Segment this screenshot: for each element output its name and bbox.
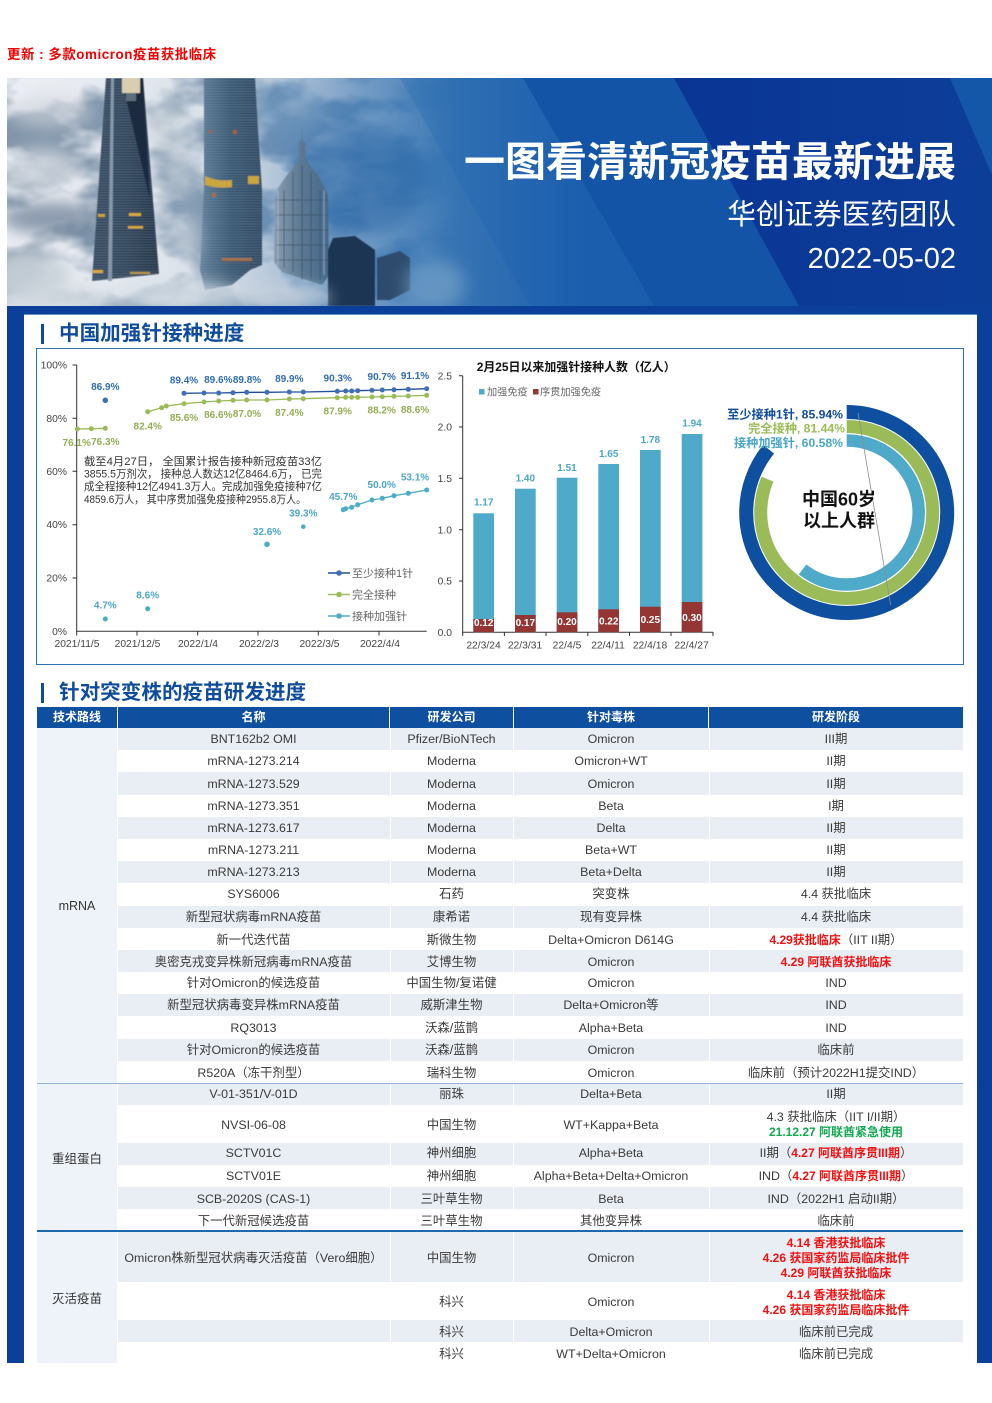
team name: 华创证券医药团队: [727, 199, 956, 231]
table group: recombinant protein: 4.3 获批临床（IIT I/II期）: [767, 1110, 905, 1124]
table group: mRNA: Delta: [597, 821, 625, 835]
series: fully vaccinated: 76.1%: [63, 438, 91, 449]
table group: inactivated vaccine: 4.14 香港获批临床: [787, 1236, 885, 1250]
table group: recombinant protein: Beta: [598, 1192, 624, 1206]
table group: recombinant protein: SCB-2020S (CAS-1): [197, 1192, 310, 1206]
table header row: 研发公司: [427, 710, 476, 724]
donut chart: population aged 60 and above: [727, 405, 954, 620]
table group: recombinant protein: NVSI-06-08: [221, 1118, 286, 1132]
bar chart y axis labels: 1.0: [438, 526, 452, 536]
bar chart y axis labels: 1.5: [438, 474, 452, 485]
series: booster: 4.7%: [94, 600, 117, 612]
series: booster: [94, 472, 429, 622]
table group: mRNA: mRNA-1273.529: [207, 777, 300, 791]
x axis labels: 2021/11/5: [54, 639, 100, 650]
table group: recombinant protein: Alpha+Beta: [579, 1146, 643, 1160]
icon: foreground dark buildings: [328, 236, 410, 306]
table group: mRNA: 沃森/蓝鹊: [425, 1021, 478, 1035]
series: fully vaccinated: 88.2%: [368, 406, 396, 416]
sequential booster value labels: 0.22: [599, 616, 619, 628]
column gaps: [390, 728, 391, 1363]
table header row: [37, 707, 963, 728]
bar chart legend: 序贯加强免疫: [540, 386, 601, 398]
table group: mRNA: mRNA-1273.214: [207, 754, 300, 768]
table group: mRNA: Delta+Omicron D614G: [548, 933, 674, 947]
table group: mRNA: 新型冠状病毒变异株mRNA疫苗: [167, 998, 340, 1012]
total value labels: 1.51: [557, 463, 577, 474]
bar chart y axis labels: 0.0: [438, 628, 452, 639]
ring: booster: [775, 440, 919, 584]
annotation text: 4859.6万人， 其中序贯加强免疫接种2955.8万人。: [84, 492, 306, 506]
y axis labels: 80%: [46, 414, 67, 425]
series: fully vaccinated: 76.3%: [91, 437, 120, 448]
series: fully vaccinated: 87.9%: [324, 406, 352, 418]
heading: variant vaccine progress: 针对突变株的疫苗研发进度: [59, 681, 306, 704]
table group: mRNA: Alpha+Beta: [579, 1021, 643, 1035]
table group: mRNA: II期: [826, 777, 846, 791]
table group: mRNA: mRNA: [59, 898, 95, 912]
x axis labels: 2022/1/4: [178, 639, 218, 650]
table group: inactivated vaccine: 4.26 获国家药监局临床批件: [763, 1302, 909, 1316]
table group: mRNA: Omicron: [588, 1066, 634, 1080]
sequential booster value labels: 0.25: [641, 615, 660, 626]
table group: mRNA: Omicron: [588, 1043, 634, 1057]
table group: mRNA: I期: [828, 799, 844, 813]
series: booster: 32.6%: [253, 527, 281, 538]
table group: mRNA: 临床前（预计2022H1提交IND）: [748, 1066, 924, 1080]
blue diagonal panels: [400, 78, 992, 306]
table group: recombinant protein: V-01-351/V-01D: [209, 1086, 298, 1100]
sequential booster value labels: 0.12: [474, 618, 494, 629]
series: fully vaccinated: 87.4%: [275, 408, 304, 419]
table group: mRNA: Beta+Delta: [580, 865, 642, 879]
blue page frame: [7, 306, 992, 1363]
series: booster: 50.0%: [368, 480, 396, 491]
table group: mRNA: Omicron: [588, 777, 634, 791]
bar chart y axis labels: [438, 372, 452, 639]
table group: mRNA: Beta: [598, 799, 624, 813]
series: fully vaccinated: 88.6%: [401, 405, 429, 416]
ring: at least one dose: [746, 412, 947, 613]
series: fully vaccinated: 87.0%: [233, 409, 261, 420]
table group: mRNA: 针对Omicron的候选疫苗: [187, 976, 320, 990]
annotation text: 截至4月27日， 全国累计报告接种新冠疫苗33亿: [84, 454, 322, 468]
table group: mRNA: [37, 728, 963, 1083]
bar chart x axis labels: 22/3/31: [508, 640, 542, 652]
table group: recombinant protein: 21.12.27 阿联酋紧急使用: [769, 1125, 903, 1139]
table group: recombinant protein: 三叶草生物: [421, 1214, 482, 1228]
table group: recombinant protein: 下一代新冠候选疫苗: [198, 1214, 309, 1228]
table header row: 技术路线: [53, 710, 101, 724]
table group: mRNA: BNT162b2 OMI: [210, 732, 297, 746]
bar chart x axis labels: 22/4/5: [553, 640, 582, 652]
x axis labels: 2022/2/3: [239, 639, 279, 650]
table group: mRNA: Omicron+WT: [574, 754, 648, 768]
total value labels: 1.65: [599, 449, 619, 460]
y axis labels: [41, 360, 67, 638]
heading: booster progress: 中国加强针接种进度: [59, 322, 244, 345]
series: fully vaccinated: 86.6%: [204, 410, 233, 421]
table group: mRNA: Delta+Omicron等: [563, 998, 659, 1012]
ring labels: 接种加强针, 60.58%: [734, 435, 843, 450]
bar chart x axis labels: 22/4/27: [674, 640, 709, 652]
legend: 接种加强针: [352, 609, 407, 623]
table group: inactivated vaccine: 灭活疫苗: [52, 1292, 102, 1306]
table group: mRNA: 沃森/蓝鹊: [425, 1043, 478, 1057]
table group: mRNA: 临床前: [817, 1043, 855, 1057]
table group: recombinant protein: 丽珠: [439, 1086, 464, 1100]
legend: [328, 566, 413, 623]
legend: 至少接种1针: [352, 566, 413, 580]
table group: mRNA: 4.29获批临床（IIT II期）: [769, 933, 903, 947]
y axis labels: 40%: [46, 520, 67, 531]
table group: recombinant protein: IND（4.27 阿联酋序贯III期）: [759, 1169, 913, 1183]
bar chart x axis labels: [466, 640, 709, 652]
y axis labels: 60%: [46, 467, 67, 478]
table group: recombinant protein: 中国生物: [427, 1118, 476, 1132]
annotation text: 成全程接种12亿4941.3万人。完成加强免疫接种7亿: [84, 479, 322, 493]
annotation text: [84, 454, 322, 506]
table group: recombinant protein: SCTV01E: [226, 1169, 281, 1183]
table group: mRNA: RQ3013: [230, 1021, 277, 1035]
table group: mRNA: 中国生物/复诺健: [406, 976, 497, 990]
table group: inactivated vaccine: 科兴: [439, 1346, 464, 1360]
table group: mRNA: Moderna: [427, 777, 476, 791]
table group: mRNA: Omicron: [588, 976, 634, 990]
bar chart legend: [479, 386, 601, 398]
table group: inactivated vaccine: Omicron: [588, 1250, 634, 1264]
table group: mRNA: 艾博生物: [427, 955, 476, 969]
series: at least one dose: 90.3%: [324, 374, 352, 384]
table group: recombinant protein: II期（4.27 阿联酋序贯III期）: [760, 1146, 912, 1160]
total value labels: 1.40: [516, 474, 535, 484]
bar chart legend: 加强免疫: [487, 386, 528, 398]
table group: inactivated vaccine: WT+Delta+Omicron: [556, 1346, 666, 1360]
sequential booster value labels: 0.17: [516, 618, 535, 629]
table group: inactivated vaccine: Omicron株新型冠状病毒灭活疫苗（Vero细胞）: [124, 1250, 383, 1264]
table group: inactivated vaccine: 中国生物: [427, 1250, 476, 1264]
table group: inactivated vaccine: 科兴: [439, 1324, 464, 1338]
y axis labels: 20%: [46, 574, 67, 584]
header title block: [464, 139, 956, 275]
table group: recombinant protein: 临床前: [817, 1214, 855, 1228]
table group: mRNA: IND: [825, 1021, 847, 1035]
table group: mRNA: 4.29 阿联酋获批临床: [781, 955, 891, 969]
ring: fully vaccinated: [761, 426, 933, 598]
table group: recombinant protein: IND（2022H1 启动II期）: [767, 1192, 905, 1206]
series: at least one dose: 90.7%: [368, 372, 396, 383]
table group: mRNA: II期: [826, 843, 846, 857]
table group: mRNA: Moderna: [427, 754, 476, 768]
table group: recombinant protein: 三叶草生物: [421, 1192, 482, 1206]
sequential booster value labels: 0.20: [557, 617, 577, 628]
bar chart x axis labels: 22/4/18: [633, 640, 667, 652]
table group: inactivated vaccine: Delta+Omicron: [570, 1324, 652, 1338]
update note: 更新 : 多款omicron疫苗获批临床: [7, 47, 217, 62]
table group: inactivated vaccine: 临床前已完成: [799, 1346, 873, 1360]
stacked bars: [473, 434, 702, 632]
ring labels: [727, 406, 845, 450]
table group: mRNA: 瑞科生物: [427, 1066, 476, 1080]
table group: mRNA: 斯微生物: [427, 933, 476, 947]
table group: recombinant protein: Alpha+Beta+Delta+Omicron: [534, 1169, 688, 1183]
table group: mRNA: 石药: [439, 887, 464, 901]
x axis labels: 2022/3/5: [299, 639, 340, 650]
bar chart title: 2月25日以来加强针接种人数（亿人）: [477, 359, 676, 374]
table group: mRNA: 4.4 获批临床: [801, 887, 871, 901]
x axis labels: 2021/12/5: [115, 639, 161, 650]
series: at least one dose: 91.1%: [401, 371, 429, 382]
total value labels: 1.78: [641, 435, 660, 446]
table group: inactivated vaccine: 4.29 阿联酋获批临床: [781, 1266, 891, 1280]
series: fully vaccinated: 82.4%: [134, 422, 162, 432]
table group: inactivated vaccine: Omicron: [588, 1295, 634, 1309]
table header row: 名称: [241, 710, 266, 724]
table group: mRNA: 奥密克戎变异株新冠病毒mRNA疫苗: [155, 955, 352, 969]
bar chart y axis labels: 0.5: [438, 576, 452, 588]
table group: mRNA: III期: [825, 732, 847, 746]
table group: mRNA: 康希诺: [433, 910, 470, 924]
table group: recombinant protein: 神州细胞: [427, 1169, 476, 1183]
table group: mRNA: Moderna: [427, 843, 476, 857]
sequential booster value labels: 0.30: [682, 613, 702, 624]
series: at least one dose: 89.6%: [204, 375, 233, 386]
table group: mRNA: 威斯津生物: [421, 998, 482, 1012]
line chart: vaccination rates: [41, 360, 430, 650]
table group: inactivated vaccine: [37, 1232, 963, 1363]
table group: mRNA: 针对Omicron的候选疫苗: [187, 1043, 320, 1057]
bar chart x axis labels: 22/4/11: [591, 640, 625, 652]
table group: mRNA: R520A（冻干剂型）: [197, 1066, 310, 1080]
table header row: 针对毒株: [587, 710, 635, 724]
x axis labels: [54, 639, 400, 650]
icon: Shanghai Tower: [200, 78, 262, 290]
table group: mRNA: II期: [826, 754, 846, 768]
bar chart y axis labels: 2.5: [438, 372, 452, 382]
table group: mRNA: 突变株: [592, 887, 630, 901]
table group: recombinant protein: 神州细胞: [427, 1146, 476, 1160]
table group: recombinant protein: Delta+Beta: [580, 1086, 642, 1100]
table header row: 研发阶段: [812, 710, 860, 724]
annotation text: 3855.5万剂次， 接种总人数达12亿8464.6万， 已完: [84, 467, 322, 481]
series: at least one dose: 89.4%: [170, 376, 198, 386]
series: booster: 53.1%: [401, 472, 429, 484]
table group: mRNA: Pfizer/BioNTech: [407, 732, 496, 746]
x axis labels: 2022/4/4: [360, 639, 400, 650]
table group: inactivated vaccine: 科兴: [439, 1295, 464, 1309]
table group: inactivated vaccine: 4.26 获国家药监局临床批件: [763, 1250, 909, 1264]
series: at least one dose: 89.9%: [275, 374, 304, 385]
table group: recombinant protein: SCTV01C: [226, 1146, 281, 1160]
series: fully vaccinated: 85.6%: [170, 413, 198, 424]
table group: mRNA: II期: [826, 865, 846, 879]
chart frame panel: [36, 348, 964, 665]
table group: mRNA: Moderna: [427, 821, 476, 835]
table group: mRNA: mRNA-1273.351: [207, 799, 300, 813]
y axis labels: 100%: [41, 360, 67, 372]
table group: mRNA: IND: [825, 976, 847, 990]
table group: mRNA: 新型冠状病毒mRNA疫苗: [186, 910, 321, 924]
header banner photo: [7, 78, 992, 306]
table group: recombinant protein: WT+Kappa+Beta: [563, 1118, 659, 1132]
table group: mRNA: IND: [825, 998, 847, 1012]
table group: mRNA: Moderna: [427, 865, 476, 879]
total value labels: 1.17: [474, 498, 494, 508]
icon: Shanghai World Financial Center tower: [92, 78, 159, 281]
series: at least one dose: 89.8%: [233, 375, 261, 386]
ring labels: 至少接种1针, 85.94%: [727, 406, 843, 422]
date: 2022-05-02: [808, 243, 956, 275]
table group: recombinant protein: [37, 1084, 963, 1230]
table group: mRNA: Omicron: [588, 955, 634, 969]
series: fully vaccinated: [63, 393, 429, 449]
table group: mRNA: Moderna: [427, 799, 476, 813]
main title: 一图看清新冠疫苗最新进展: [464, 139, 956, 185]
table group: mRNA: mRNA-1273.617: [207, 821, 300, 835]
sequential booster value labels: [474, 613, 702, 629]
icon: Jin Mao Tower: [274, 125, 329, 285]
series: booster: 45.7%: [329, 492, 358, 503]
table group: recombinant protein: 重组蛋白: [52, 1152, 102, 1166]
series: booster: 39.3%: [289, 508, 318, 520]
series: at least one dose: 86.9%: [91, 382, 120, 393]
donut center label: 以上人群: [803, 511, 875, 531]
table group: recombinant protein: II期: [826, 1086, 846, 1100]
donut center label: [802, 490, 876, 531]
table group: mRNA: SYS6006: [227, 887, 280, 901]
table group: mRNA: mRNA-1273.213: [207, 865, 300, 879]
table group: mRNA: mRNA-1273.211: [208, 843, 299, 857]
series: at least one dose: [91, 371, 429, 403]
table group: inactivated vaccine: 临床前已完成: [799, 1324, 873, 1338]
table group: inactivated vaccine: 4.14 香港获批临床: [787, 1288, 885, 1302]
bar chart: booster recipients: [438, 359, 714, 652]
total value labels: 1.94: [682, 418, 702, 430]
bar chart x axis labels: 22/3/24: [466, 640, 501, 652]
table group: mRNA: Beta+WT: [585, 843, 637, 857]
donut center label: 中国60岁: [802, 490, 876, 510]
bar chart y axis labels: 2.0: [438, 422, 452, 434]
white content panel: [24, 315, 976, 1363]
table group: mRNA: 4.4 获批临床: [801, 910, 871, 924]
ring labels: 完全接种, 81.44%: [748, 420, 845, 436]
series: booster: 8.6%: [136, 590, 159, 602]
legend: 完全接种: [352, 588, 396, 602]
table group: mRNA: 现有变异株: [580, 910, 642, 924]
table group: mRNA: Omicron: [588, 732, 634, 746]
table group: mRNA: II期: [826, 821, 846, 835]
table group: mRNA: 新一代迭代苗: [216, 933, 291, 947]
table group: recombinant protein: 其他变异株: [580, 1214, 642, 1228]
total value labels: [474, 418, 702, 508]
y axis labels: 0%: [52, 627, 67, 638]
